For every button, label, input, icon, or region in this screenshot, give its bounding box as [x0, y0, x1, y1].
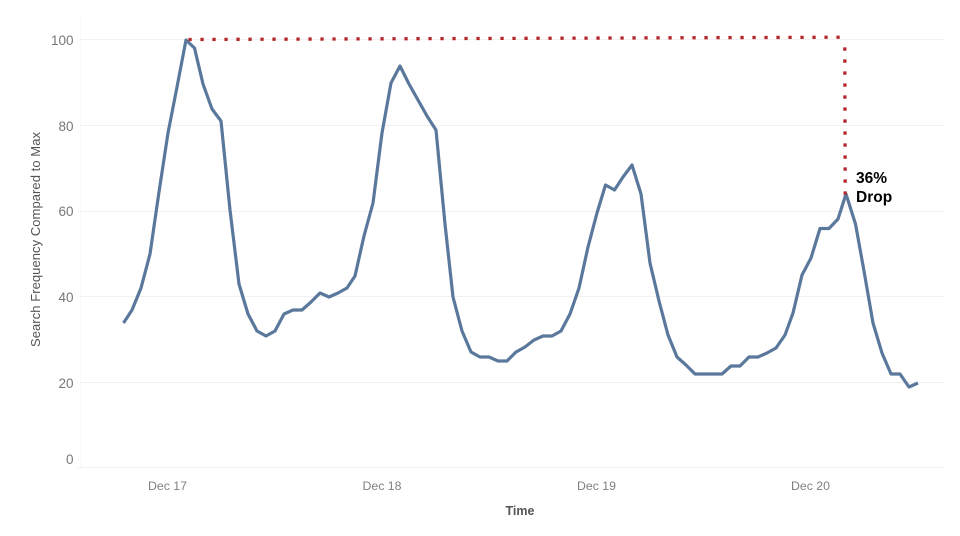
y-axis labels: 100	[51, 33, 74, 48]
y-axis labels: 80	[58, 119, 74, 134]
y-axis labels	[51, 33, 74, 467]
y-axis labels: 60	[58, 204, 74, 219]
x-axis labels: Dec 18	[363, 479, 402, 493]
y-axis labels: 20	[58, 376, 74, 391]
x-axis labels: Dec 17	[148, 479, 187, 493]
y-axis title: Search Frequency Compared to Max	[28, 132, 43, 347]
dotted drop indicator	[188, 37, 845, 195]
x-axis title: Time	[506, 504, 535, 518]
callout: 36% drop: Drop	[856, 189, 892, 206]
y-axis labels: 0	[66, 452, 74, 467]
x-axis labels: Dec 19	[577, 479, 616, 493]
x-axis labels: Dec 20	[791, 479, 830, 493]
y-axis labels: 40	[58, 290, 74, 305]
callout: 36% drop	[856, 170, 892, 206]
data line	[124, 40, 918, 387]
callout: 36% drop: 36%	[856, 170, 887, 187]
x-axis labels	[148, 479, 830, 493]
